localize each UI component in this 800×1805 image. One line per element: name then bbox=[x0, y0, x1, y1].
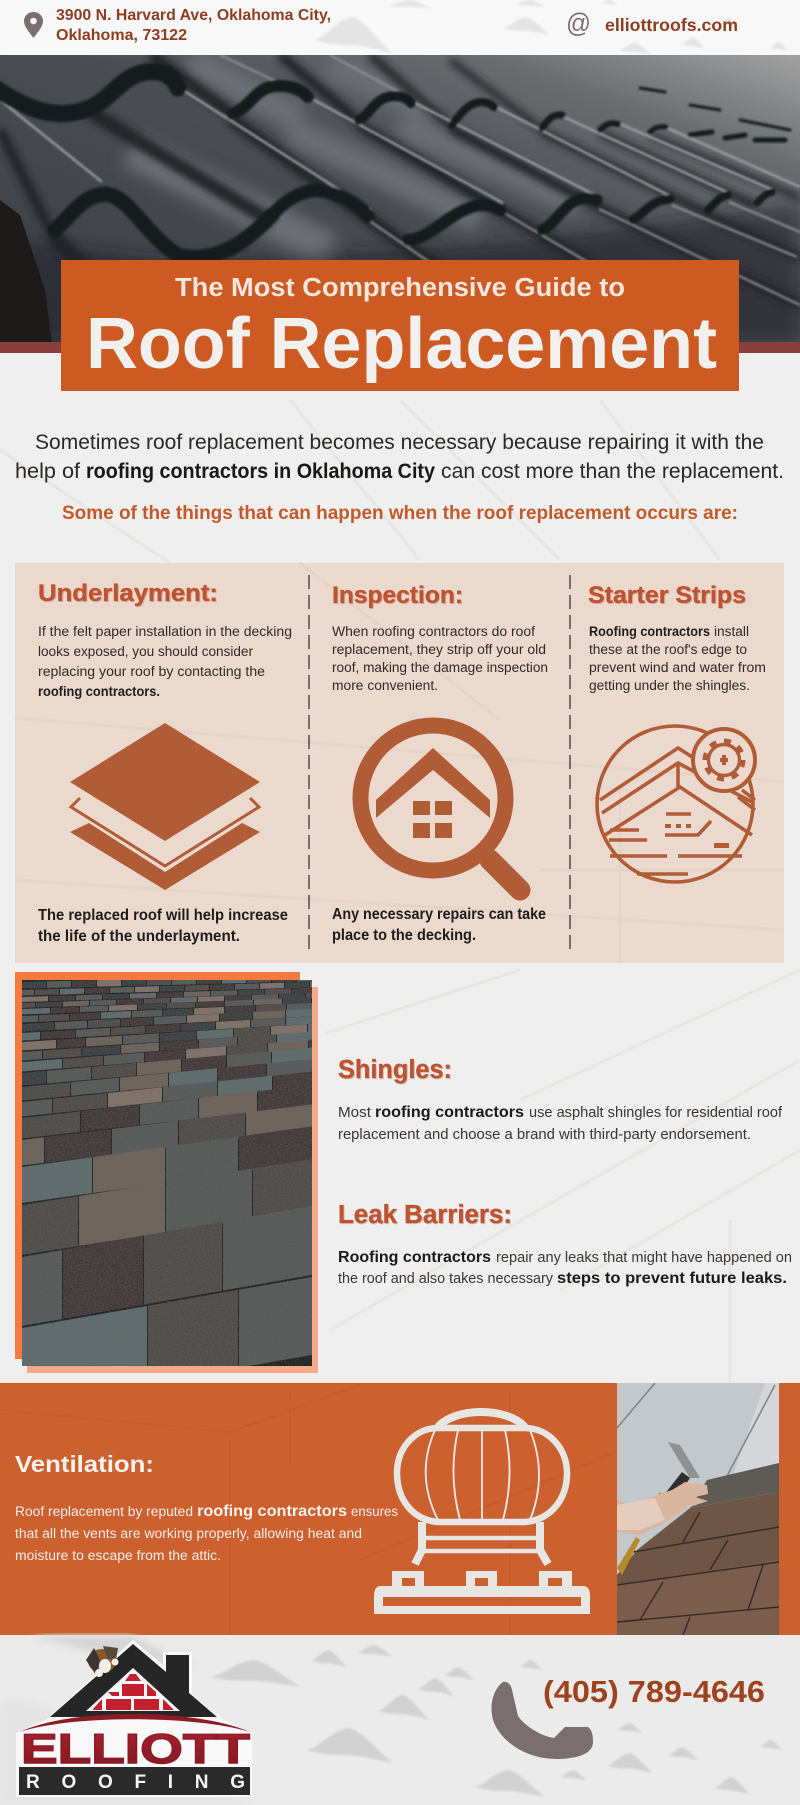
website: elliottroofs.com bbox=[605, 15, 738, 35]
column: inspection: roof, making the damage inspection bbox=[332, 660, 548, 675]
logo: Elliott Roofing: ROOFING bbox=[26, 1772, 245, 1793]
brick gable bbox=[86, 1668, 180, 1711]
column: starter strips: getting under the shingles. bbox=[589, 678, 750, 693]
intro paragraph: can cost more than the replacement. bbox=[441, 459, 784, 483]
column: inspection bbox=[332, 582, 548, 944]
address text bbox=[56, 7, 331, 44]
subheading: Some of the things that can happen when the roof replacement occurs are: bbox=[62, 502, 738, 524]
column: starter strips bbox=[588, 582, 766, 882]
block: leak barriers: the roof and also takes necessary bbox=[338, 1271, 554, 1287]
hero photo: roof tiles bbox=[0, 55, 800, 350]
icon: location pin bbox=[24, 12, 43, 38]
block: shingles: Shingles: bbox=[338, 1056, 452, 1084]
photo: asphalt shingles with offset frames bbox=[15, 972, 318, 1373]
title box bbox=[61, 260, 739, 391]
column: starter strips: prevent wind and water from bbox=[589, 660, 766, 675]
column: starter strips: install bbox=[714, 624, 749, 639]
ventilation text: ensures bbox=[351, 1504, 398, 1519]
icon: layers bbox=[70, 723, 260, 890]
column: inspection: Any necessary repairs can take bbox=[332, 906, 546, 923]
phone number: (405) 789-4646 bbox=[543, 1674, 765, 1709]
logo: Elliott Roofing: ELLIOTT bbox=[21, 1725, 250, 1772]
curved swoosh bbox=[20, 1714, 250, 1732]
block: shingles: roofing contractors bbox=[375, 1104, 524, 1121]
title box: The Most Comprehensive Guide to bbox=[175, 274, 625, 302]
column: underlayment bbox=[38, 580, 292, 945]
block: shingles bbox=[338, 1056, 783, 1143]
icon: magnifier with house bbox=[360, 726, 520, 890]
ventilation text bbox=[15, 1451, 398, 1563]
column: inspection: When roofing contractors do roof bbox=[332, 624, 535, 639]
column: starter strips: Roofing contractors bbox=[589, 624, 710, 639]
roof with chimney bbox=[50, 1644, 217, 1717]
intro paragraph: roofing contractors in Oklahoma City bbox=[86, 459, 435, 483]
address text: 3900 N. Harvard Ave, Oklahoma City, bbox=[56, 7, 331, 24]
column: underlayment: the life of the underlayment. bbox=[38, 928, 240, 945]
column: starter strips: these at the roof's edge to bbox=[589, 642, 747, 657]
column: underlayment: replacing your roof by contacting the bbox=[38, 664, 265, 679]
photo: hammering shingles bbox=[617, 1383, 779, 1635]
intro paragraph: help of bbox=[15, 459, 80, 483]
column: starter strips: Starter Strips bbox=[588, 582, 746, 609]
column: inspection: place to the decking. bbox=[332, 927, 476, 944]
title box: Roof Replacement bbox=[86, 304, 717, 384]
panel: three columns bbox=[15, 563, 784, 963]
column: underlayment: looks exposed, you should consider bbox=[38, 644, 254, 659]
column: inspection: more convenient. bbox=[332, 678, 438, 693]
ventilation text: Ventilation: bbox=[15, 1451, 154, 1477]
intro paragraph: Sometimes roof replacement becomes necessary because repairing it with the bbox=[35, 430, 764, 454]
icon: phone bbox=[492, 1682, 593, 1759]
dog mascot bbox=[86, 1646, 118, 1677]
ventilation text: moisture to escape from the attic. bbox=[15, 1548, 221, 1563]
address text: Oklahoma, 73122 bbox=[56, 27, 187, 44]
block: shingles: Most bbox=[338, 1105, 371, 1121]
column: inspection: replacement, they strip off your old bbox=[332, 642, 546, 657]
ventilation text: that all the vents are working properly, allowing heat and bbox=[15, 1526, 362, 1541]
column: inspection: Inspection: bbox=[332, 582, 463, 609]
column: underlayment: If the felt paper installation in the decking bbox=[38, 624, 292, 639]
ventilation text: Roof replacement by reputed bbox=[15, 1504, 193, 1519]
block: shingles: use asphalt shingles for residential roof bbox=[529, 1105, 783, 1121]
block: leak barriers: Leak Barriers: bbox=[338, 1201, 512, 1229]
accent bar under photo bbox=[0, 342, 800, 353]
logo: Elliott Roofing bbox=[16, 1640, 252, 1797]
column: underlayment: roofing contractors. bbox=[38, 684, 160, 699]
column: underlayment: The replaced roof will help increase bbox=[38, 907, 288, 924]
footer background bbox=[0, 1635, 800, 1805]
icon: roof with gear bbox=[597, 726, 755, 882]
intro paragraph bbox=[15, 430, 784, 483]
block: leak barriers: repair any leaks that might have happened on bbox=[496, 1250, 792, 1266]
icon: turbine roof vent bbox=[374, 1412, 590, 1614]
block: shingles: replacement and choose a brand with third-party endorsement. bbox=[338, 1127, 751, 1143]
header band bbox=[0, 0, 800, 55]
block: leak barriers bbox=[338, 1201, 792, 1287]
ventilation text: roofing contractors bbox=[197, 1503, 347, 1520]
page background lines bbox=[0, 400, 800, 1383]
band: ventilation bbox=[0, 1383, 800, 1635]
icon: at sign: @ bbox=[566, 8, 591, 38]
block: leak barriers: steps to prevent future leaks. bbox=[557, 1270, 787, 1287]
block: leak barriers: Roofing contractors bbox=[338, 1249, 491, 1266]
column: underlayment: Underlayment: bbox=[38, 580, 218, 607]
